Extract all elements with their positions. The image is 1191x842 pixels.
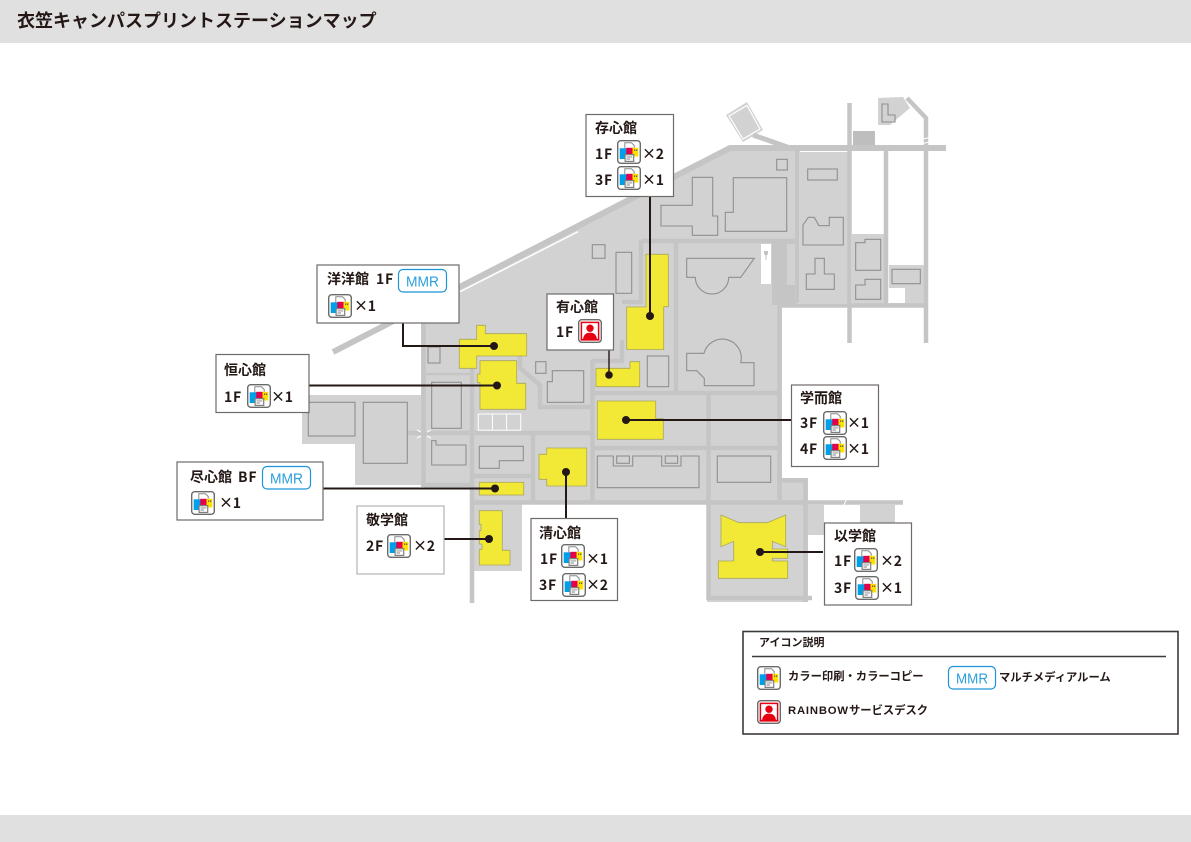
- parking: [478, 414, 521, 430]
- legend icon: MMR: [948, 666, 996, 689]
- callout: 学而館: 学而館: [800, 388, 842, 408]
- footer bar: [0, 815, 1191, 842]
- connector: 学而館: [622, 416, 791, 424]
- building: 恒心館: [477, 361, 526, 409]
- callout: 以学館: ×2: [880, 551, 902, 571]
- legend label: rainbow desk: サービスデスク: [849, 702, 928, 718]
- connector: 存心館: [646, 197, 654, 320]
- building: 敬学館: [479, 511, 510, 565]
- callout: 洋洋館: MMR: [406, 274, 439, 290]
- connector: 恒心館: [309, 382, 501, 390]
- callout: 学而館: ×1: [847, 439, 869, 459]
- legend heading: アイコン説明: [759, 634, 824, 650]
- callout: 敬学館: ×2: [413, 536, 435, 556]
- callout: 清心館: ×1: [586, 549, 608, 569]
- connector: 敬学館: [444, 535, 493, 543]
- connector: 尽心館: [323, 484, 499, 492]
- callout: 学而館: 3F: [800, 413, 818, 433]
- building: 洋洋館: [459, 325, 527, 368]
- legend label: rainbow desk: RAINBOW: [788, 705, 849, 717]
- legend icon: rainbow desk: [758, 701, 780, 723]
- callout: 恒心館: ×1: [271, 387, 293, 407]
- building: 清心館: [539, 448, 587, 486]
- campus map: [302, 97, 946, 603]
- building: 学而館: [597, 401, 663, 439]
- connector: 清心館: [562, 468, 570, 518]
- building: 有心館: [596, 362, 640, 387]
- callout: 存心館: 3F: [595, 170, 613, 190]
- building: 以学館: [718, 515, 788, 578]
- callout: 敬学館: 2F: [366, 536, 384, 556]
- building: 存心館: [627, 254, 668, 350]
- callout: 有心館: [547, 294, 614, 350]
- callout: 以学館: 1F: [834, 551, 852, 571]
- callout: 学而館: ×1: [847, 413, 869, 433]
- ground areas: [302, 97, 924, 602]
- callout: 洋洋館: 1F: [376, 269, 394, 289]
- callout: 敬学館: 敬学館: [366, 510, 408, 530]
- callout: 清心館: [531, 518, 618, 600]
- callout: 清心館: 1F: [540, 549, 558, 569]
- callout: 存心館: ×2: [642, 144, 664, 164]
- callout: 尽心館: [177, 462, 323, 520]
- buildings: [308, 104, 920, 488]
- callout: 洋洋館: [317, 265, 459, 323]
- callout: 尽心館: MMR: [270, 470, 303, 488]
- callout: 以学館: [824, 523, 912, 605]
- callout: 敬学館: [357, 506, 444, 574]
- callout: 以学館: ×1: [880, 578, 902, 598]
- callout: 尽心館: BF: [238, 467, 257, 487]
- callout: 清心館: 3F: [539, 575, 557, 595]
- legend label: color print: カラー印刷・カラーコピー: [788, 668, 924, 684]
- callout: 洋洋館: 洋洋館: [327, 269, 369, 289]
- connector: 洋洋館: [403, 323, 498, 350]
- callout: 清心館: ×2: [586, 575, 608, 595]
- callout: 以学館: 以学館: [834, 526, 876, 546]
- callout: 洋洋館: ×1: [354, 296, 376, 316]
- callout: 以学館: 3F: [834, 578, 852, 598]
- icon: marker in white strip: [764, 251, 768, 260]
- callout: 有心館: 1F: [556, 322, 574, 342]
- legend panel: [743, 632, 1178, 734]
- callout: 存心館: [586, 114, 674, 196]
- callout: 恒心館: 1F: [224, 387, 242, 407]
- roads: [333, 98, 946, 603]
- callout: 学而館: [792, 385, 878, 466]
- building: 尽心館: [479, 482, 524, 495]
- callout: 存心館: ×1: [642, 170, 664, 190]
- connector: 有心館: [605, 350, 613, 379]
- legend label: multimedia room: マルチメディアルーム: [999, 669, 1111, 685]
- callout: 清心館: 清心館: [539, 523, 581, 543]
- callout: 恒心館: 恒心館: [224, 360, 266, 380]
- callout: 尽心館: ×1: [219, 493, 241, 513]
- title: 衣笠キャンパスプリントステーションマップ: [17, 7, 377, 33]
- callout: 尽心館: 尽心館: [190, 467, 232, 487]
- callout: 有心館: 有心館: [556, 297, 598, 317]
- header bar: [0, 0, 1191, 43]
- legend icon: color print: [758, 667, 780, 689]
- callout: 存心館: 存心館: [595, 118, 637, 138]
- connector: 以学館: [756, 548, 823, 556]
- legend icon: MMR: MMR: [956, 670, 988, 688]
- callout: 学而館: 4F: [800, 439, 818, 459]
- callout: 存心館: 1F: [595, 144, 613, 164]
- callout: 恒心館: [216, 354, 309, 412]
